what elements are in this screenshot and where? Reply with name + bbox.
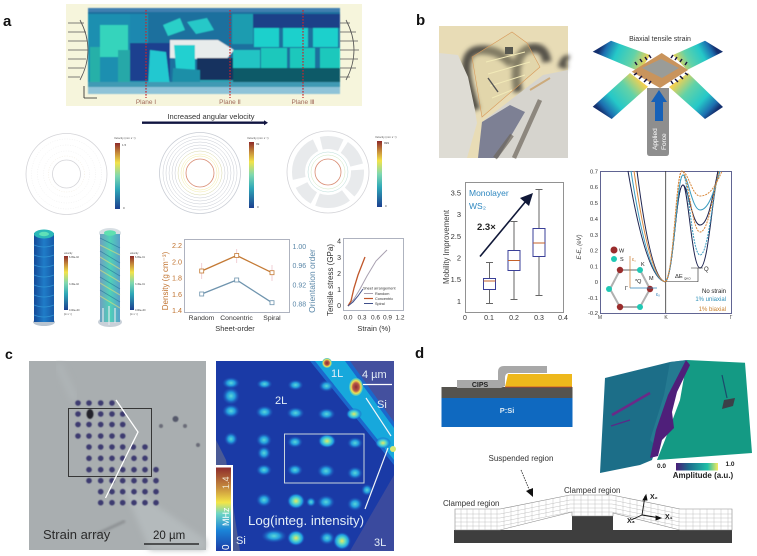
strain axes: X₁ (665, 514, 673, 521)
band structure chart: Γ (730, 315, 733, 321)
colorbar 3: 999 (384, 141, 389, 145)
density chart: 2.0 (172, 258, 182, 266)
amplitude colorbar: Amplitude (a.u.) (673, 471, 734, 480)
panel label d: d (415, 345, 424, 362)
brillouin zone inset: S (620, 257, 624, 263)
velocity disc 3 (287, 131, 369, 213)
intensity map: Log(integ. intensity) (248, 513, 364, 528)
band structure chart: Q (704, 267, 709, 273)
density chart: Spiral (263, 315, 281, 322)
mobility box plot: 0.3 (534, 315, 544, 322)
mobility box plot: 2.5 (451, 232, 461, 241)
tensile stress chart: 3 (337, 255, 341, 262)
colorbar 1 (114, 136, 136, 210)
tensile stress chart: Tensile stress (GPa) (326, 244, 335, 316)
band structure chart: ΔE (675, 274, 683, 280)
tensile stress chart: Concentric (375, 297, 393, 301)
mobility box plot: 1.5 (451, 275, 461, 284)
brillouin zone inset: ε꜀ (632, 257, 636, 263)
band structure chart: 0.2 (590, 248, 598, 254)
plane labels: Plane Ⅱ (219, 99, 241, 106)
strain axes: X₂ (650, 494, 658, 501)
device cross-section: CIPS (472, 382, 488, 389)
brillouin zone inset (606, 246, 660, 310)
mobility box plot: Mobility Improvement (442, 209, 451, 284)
brillouin zone inset: M (649, 276, 654, 282)
label clamped left: Clamped region (443, 499, 499, 508)
cylinder spiral (98, 228, 122, 327)
band structure chart: 0 (595, 280, 598, 286)
brillouin zone inset: εₓ (656, 292, 660, 298)
band structure chart: 0.3 (590, 233, 598, 239)
amplitude colorbar (657, 461, 735, 480)
tensile stress chart: 1 (337, 287, 341, 294)
colorbar 2: Velocity (mm s⁻¹) (247, 136, 269, 140)
mobility box plot: 3.5 (451, 188, 461, 198)
density chart: Concentric (220, 315, 253, 322)
cylinder blue (33, 230, 55, 326)
tensile stress chart: 0 (337, 303, 341, 310)
colorbar cylinder 2: 0.00e+00 (135, 309, 146, 312)
band structure chart: 0.5 (590, 201, 598, 207)
colorbar cylinder 1: [m s⁻¹] (64, 313, 72, 316)
micrograph: strain array: 20 µm (153, 530, 185, 542)
density chart: Density (g cm⁻³) (161, 251, 170, 310)
colorbar cylinder 1: 3.49e-02 (69, 283, 79, 286)
strained device cross (593, 41, 723, 119)
colorbar cylinder 1 (64, 252, 80, 316)
density chart: Random (189, 315, 215, 322)
plane markers (146, 10, 303, 98)
band structure chart: 0.1 (590, 264, 598, 270)
density chart: 1.4 (172, 306, 182, 315)
velocity disc 1 (26, 134, 107, 214)
intensity map (216, 358, 396, 551)
colorbar cylinder 2: [m s⁻¹] (130, 313, 138, 316)
tensile stress chart: Random (375, 292, 389, 296)
colorbar map: MHz (221, 507, 231, 526)
colorbar 3 (375, 135, 397, 208)
tensile stress chart: Strain (%) (357, 324, 391, 333)
density chart: 1.00 (292, 244, 306, 251)
mobility box plot: 2.3× (477, 222, 496, 233)
band structure chart: 0.6 (590, 185, 598, 191)
caption biaxial: Biaxial tensile strain (629, 36, 691, 43)
mobility box plot: 0.4 (558, 315, 568, 322)
device cross-section: P:Si (500, 406, 514, 415)
mobility box plot: 0 (463, 315, 467, 322)
axes mini (84, 86, 97, 98)
applied force arrow: Force (661, 133, 668, 150)
mobility box plot: 0.1 (484, 315, 494, 322)
brillouin zone inset: Γ (625, 286, 628, 292)
mobility box plot: 0.2 (509, 315, 519, 322)
band structure chart: 0.4 (590, 217, 599, 223)
tensile stress chart: Spiral (375, 302, 385, 306)
photo: wearable sensor on fabric (439, 26, 568, 158)
angular velocity arrow (142, 112, 268, 125)
density chart: Orientation order (307, 249, 317, 313)
tensile stress chart: 0.9 (383, 314, 392, 322)
3D amplitude map (600, 360, 752, 473)
colorbar map: 0 (221, 544, 232, 550)
plane labels (136, 99, 315, 106)
mobility box plot (442, 182, 568, 322)
colorbar cylinder 2: velocity (130, 252, 139, 255)
band structure chart: QKO (684, 276, 691, 280)
colorbar 3: 0 (385, 204, 387, 208)
intensity map: 3L (374, 537, 386, 549)
band structure chart: M (598, 315, 602, 321)
density chart: 1.6 (172, 290, 182, 299)
colorbar cylinder 1: 6.99e-02 (69, 256, 79, 259)
band structure chart: K (664, 315, 668, 321)
tensile stress chart: 2 (337, 271, 341, 278)
colorbar cylinder 1: 0.00e+00 (69, 309, 80, 312)
brillouin zone inset: *Q (635, 279, 642, 285)
panel label c: c (5, 346, 13, 362)
device cross-section (442, 366, 572, 427)
density chart: 1.8 (172, 274, 182, 282)
panel a: flow simulation tube (66, 4, 362, 106)
intensity map: 2L (275, 395, 287, 407)
panel label b: b (416, 12, 425, 29)
mobility box plot: Monolayer (469, 188, 509, 198)
applied force arrow: Applied (652, 128, 659, 150)
intensity map: Si (377, 399, 387, 411)
colorbar 1: 1.5 (122, 143, 127, 147)
micrograph: strain array (29, 361, 206, 550)
intensity map: 1L (331, 368, 343, 380)
band structure chart: 1% biaxial (699, 307, 726, 313)
mobility box plot: 3 (457, 210, 461, 219)
intensity map: Si (236, 535, 246, 547)
colorbar 1: Velocity (mm s⁻¹) (114, 136, 136, 140)
brillouin zone inset: W (619, 248, 625, 254)
tensile stress chart: Sheet arrangement (363, 286, 396, 290)
mobility box plot: 2 (457, 254, 461, 262)
colorbar map: 1.4 (221, 476, 231, 489)
colorbar 2: 0 (257, 205, 259, 209)
density chart: 0.96 (292, 263, 306, 270)
density chart: 2.2 (172, 241, 182, 250)
angular velocity arrow: Increased angular velocity (167, 112, 255, 121)
band structure chart (577, 170, 733, 321)
colorbar cylinder 2: 6.99e-01 (135, 256, 145, 259)
label suspended region (489, 454, 553, 497)
plane labels: Plane Ⅰ (136, 99, 156, 106)
density chart (161, 240, 317, 333)
label clamped center: Clamped region (564, 486, 620, 495)
tensile stress chart: 4 (337, 238, 341, 246)
band structure chart: -0.2 (588, 311, 598, 317)
tensile stress chart (326, 238, 405, 333)
colorbar cylinder 1: velocity (64, 252, 73, 255)
colorbar 2: 99 (256, 142, 260, 146)
micrograph: strain array: Strain array (43, 527, 111, 542)
brillouin zone inset: K (641, 262, 645, 268)
tensile stress chart: 0.6 (371, 314, 380, 322)
band structure chart: 1% uniaxial (695, 297, 726, 303)
panel label a: a (3, 13, 12, 30)
density chart: 0.92 (292, 282, 306, 290)
colorbar 2 (247, 136, 269, 209)
mobility box plot: 1 (457, 297, 461, 306)
band structure chart: E-E꜀ (eV) (577, 234, 583, 260)
amplitude colorbar: 1.0 (726, 461, 735, 468)
suspended membrane mesh (454, 495, 732, 543)
colorbar cylinder 2: 3.49e-01 (135, 283, 145, 286)
mobility box plot: WS₂ (469, 201, 486, 211)
colorbar cylinder 2 (130, 252, 146, 316)
applied force arrow (647, 88, 669, 156)
density chart: Sheet-order (215, 324, 255, 333)
tensile stress chart: 0.3 (357, 314, 367, 322)
colorbar 3: Velocity (mm s⁻¹) (375, 135, 397, 139)
inlet velocity profile arrows (68, 20, 359, 80)
band structure chart: No strain (702, 289, 726, 295)
strain axes: X₃ (627, 518, 635, 525)
plane labels: Plane Ⅲ (292, 99, 315, 106)
amplitude colorbar: 0.0 (657, 463, 666, 470)
velocity disc 2 (160, 132, 240, 214)
strain axes (627, 494, 673, 525)
density chart: 0.88 (292, 302, 306, 308)
tensile stress chart: 1.2 (395, 314, 405, 322)
label suspended region: Suspended region (489, 454, 553, 463)
band structure chart: 0.7 (590, 170, 598, 176)
colorbar 1: 0 (123, 206, 125, 210)
band structure chart: -0.1 (588, 296, 598, 302)
colorbar map (216, 465, 233, 551)
intensity map: 4 µm (362, 369, 387, 381)
tensile stress chart: 0.0 (343, 314, 353, 322)
